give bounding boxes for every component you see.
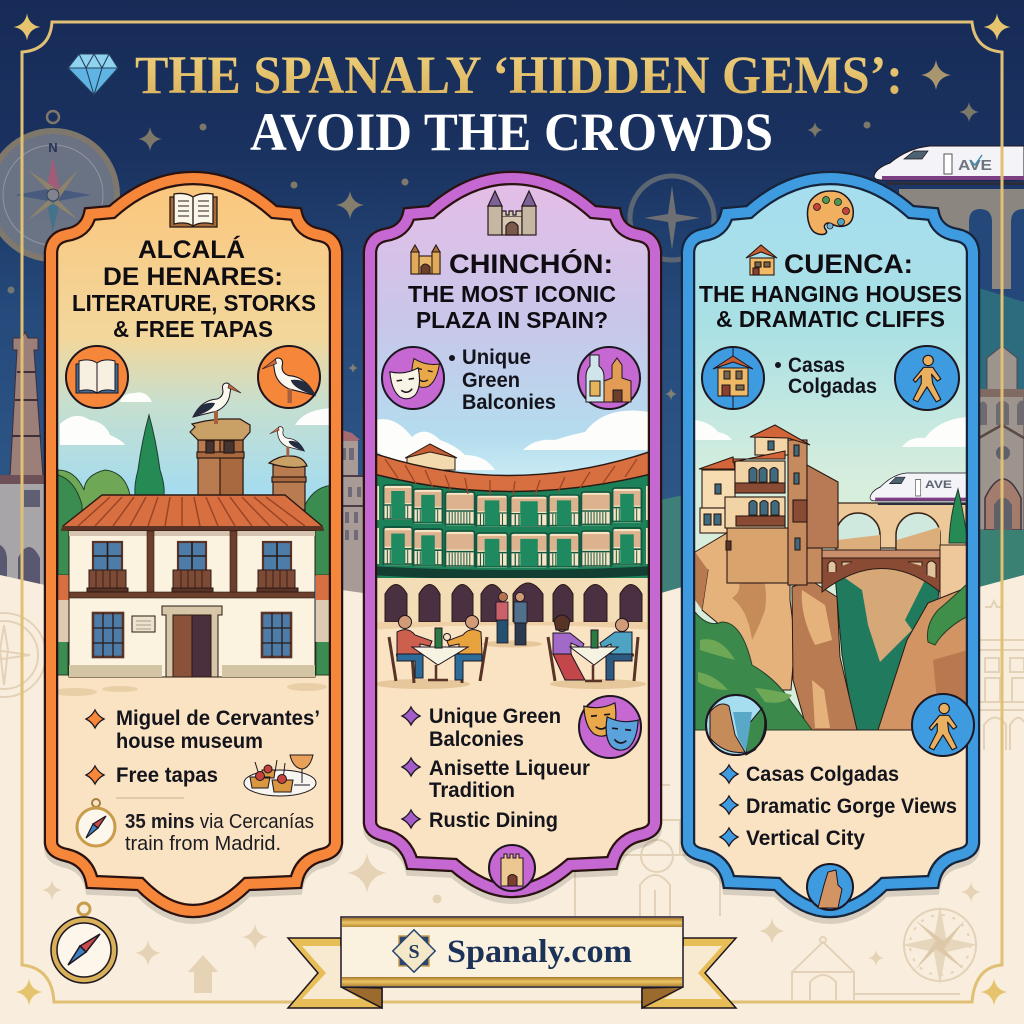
icon: diamond	[68, 54, 118, 95]
text: Unique Green Balconies	[449, 346, 556, 414]
heading: Cuenca: CUENCA:	[784, 249, 913, 279]
heading: Chinchón: CHINCHÓN:	[449, 248, 613, 279]
heading: Alcalá de Henares: & FREE TAPAS	[113, 316, 273, 342]
banner left ribbon	[288, 938, 382, 1008]
heading: Alcalá de Henares: LITERATURE, STORKS	[72, 290, 316, 316]
second chimney with stork	[269, 427, 307, 510]
title line two: AVOID THE CROWDS	[250, 102, 773, 162]
heading: Cuenca: & DRAMATIC CLIFFS	[716, 306, 945, 332]
travel time: train from Madrid.	[125, 833, 281, 855]
travel time	[125, 811, 314, 855]
list: Chinchón highlights: Rustic Dining	[429, 809, 558, 832]
icon: theatre masks badge	[382, 347, 444, 409]
illustration: Plaza Mayor	[377, 410, 648, 880]
text: Casas Colgadas: Colgadas	[788, 375, 877, 398]
cypress	[949, 489, 968, 543]
background: sky stars	[8, 60, 979, 400]
text: Casas Colgadas: Casas	[788, 354, 845, 377]
illustration: Cervantes house with storks	[58, 382, 329, 904]
heading: Cuenca: THE HANGING HOUSES	[699, 281, 962, 307]
panel border	[51, 178, 336, 911]
icon: open book	[170, 193, 217, 227]
icon: gorge badge	[706, 695, 766, 755]
text: Unique Green Balconies: Unique	[462, 346, 531, 369]
list: Chinchón highlights: Unique Green	[429, 705, 561, 728]
plaza arcade	[370, 578, 655, 626]
chimney with nest	[190, 419, 250, 497]
background: high speed train	[874, 146, 1024, 185]
text: Casas Colgadas	[775, 354, 877, 398]
panel border	[688, 178, 973, 911]
plaza roof house	[406, 452, 456, 470]
palette paints	[814, 196, 850, 229]
tower block	[699, 425, 838, 585]
banner plate	[341, 917, 683, 987]
icon: rock badge	[807, 864, 853, 910]
background: bottom stars	[42, 853, 981, 993]
banner right ribbon	[642, 938, 736, 1008]
cuenca train	[870, 473, 968, 505]
panel border	[370, 178, 655, 891]
icon: masks badge lower	[579, 696, 641, 758]
banner text: Spanaly.com	[447, 934, 632, 970]
background: centre-left building	[342, 430, 364, 595]
tiled roof	[62, 495, 323, 530]
background: right cathedral	[979, 346, 1024, 588]
list: Cuenca highlights: Vertical City	[746, 827, 865, 850]
background: large compass	[0, 111, 117, 259]
background: aqueduct	[899, 189, 1024, 310]
heading: Chinchón	[408, 245, 616, 333]
icon: tapas plate and cocktail	[244, 755, 316, 796]
list: Alcalá highlights	[86, 707, 320, 787]
left greens	[695, 612, 812, 730]
gold compass	[51, 903, 117, 983]
list: Cuenca highlights	[720, 763, 957, 850]
left cliff	[695, 533, 795, 690]
heading: Alcalá de Henares: DE HENARES:	[103, 263, 283, 291]
divider	[116, 797, 184, 799]
background: faded centre compass	[630, 176, 714, 260]
icon: stork badge	[258, 346, 320, 408]
upper windows and balconies	[87, 542, 298, 677]
text: Unique Green Balconies: Green	[462, 369, 520, 392]
illustration: hanging houses and gorge	[695, 417, 966, 899]
list: Cuenca highlights: Dramatic Gorge Views	[746, 795, 957, 818]
right table diners	[548, 615, 638, 681]
heading: Cuenca	[699, 245, 962, 332]
title	[68, 45, 903, 162]
icon: walker badge lower	[912, 694, 974, 756]
icon: castle	[488, 191, 536, 235]
icon: walker badge	[895, 346, 959, 410]
list: Alcalá highlights: house museum	[116, 730, 263, 753]
list: Alcalá highlights: Miguel de Cervantes’	[116, 707, 320, 730]
title line one: THE SPANALY ‘HIDDEN GEMS’:	[135, 45, 903, 105]
right cliff	[878, 587, 968, 730]
panel: Alcalá de Henares	[45, 178, 345, 920]
text: Unique Green Balconies: Balconies	[462, 391, 556, 414]
background: large compass: N	[48, 140, 58, 155]
plaza tiled roof	[370, 450, 655, 492]
icon: liqueur and church badge	[578, 347, 640, 409]
left table diners	[389, 616, 487, 683]
background: night sky	[0, 0, 1024, 620]
brown rock	[792, 580, 857, 730]
list: Alcalá highlights: Free tapas	[116, 764, 218, 787]
banner: Spanaly.com	[288, 917, 736, 1008]
plaza green galleries	[370, 472, 655, 578]
icon: hanging house badge	[702, 347, 764, 409]
background: faint landmark sketches	[0, 601, 1024, 1000]
stork on main chimney	[193, 383, 241, 424]
background: left tower	[0, 332, 48, 590]
gorge	[835, 575, 940, 730]
icon: small house	[746, 245, 777, 275]
list: Chinchón highlights	[402, 705, 590, 832]
panel: Chinchón	[364, 178, 664, 902]
background: right hills	[661, 280, 1024, 600]
list: Chinchón highlights: Tradition	[429, 779, 515, 802]
travel time: 35 mins via Cercanías	[125, 811, 314, 833]
standing couple	[496, 592, 527, 645]
icon: pocket compass	[76, 799, 116, 847]
icon: small castle	[411, 245, 440, 274]
background: faint compass rose	[902, 905, 978, 985]
cuenca stone bridge	[822, 550, 940, 592]
right pillar	[940, 544, 966, 598]
list: Chinchón highlights: Balconies	[429, 728, 524, 751]
heading: Alcalá de Henares: ALCALÁ	[138, 235, 245, 264]
heading: Chinchón: THE MOST ICONIC	[408, 281, 616, 307]
list: Chinchón highlights: Anisette Liqueur	[429, 757, 590, 780]
icon: tower badge	[489, 845, 535, 891]
heading: Alcalá de Henares	[72, 235, 316, 342]
cuenca train: AVE	[925, 479, 952, 491]
list: Cuenca highlights: Casas Colgadas	[746, 763, 899, 786]
aqueduct	[835, 503, 966, 548]
icon: palette	[807, 191, 853, 234]
house wall	[69, 531, 315, 677]
logo: Spanaly S badge: S	[408, 941, 420, 963]
logo: Spanaly S badge	[393, 930, 435, 972]
heading: Chinchón: PLAZA IN SPAIN?	[416, 307, 608, 333]
background: high speed train: AVE	[958, 157, 992, 174]
icon: book badge	[66, 346, 128, 408]
panel: Cuenca	[682, 178, 982, 922]
background: cream ground	[0, 575, 1024, 1024]
